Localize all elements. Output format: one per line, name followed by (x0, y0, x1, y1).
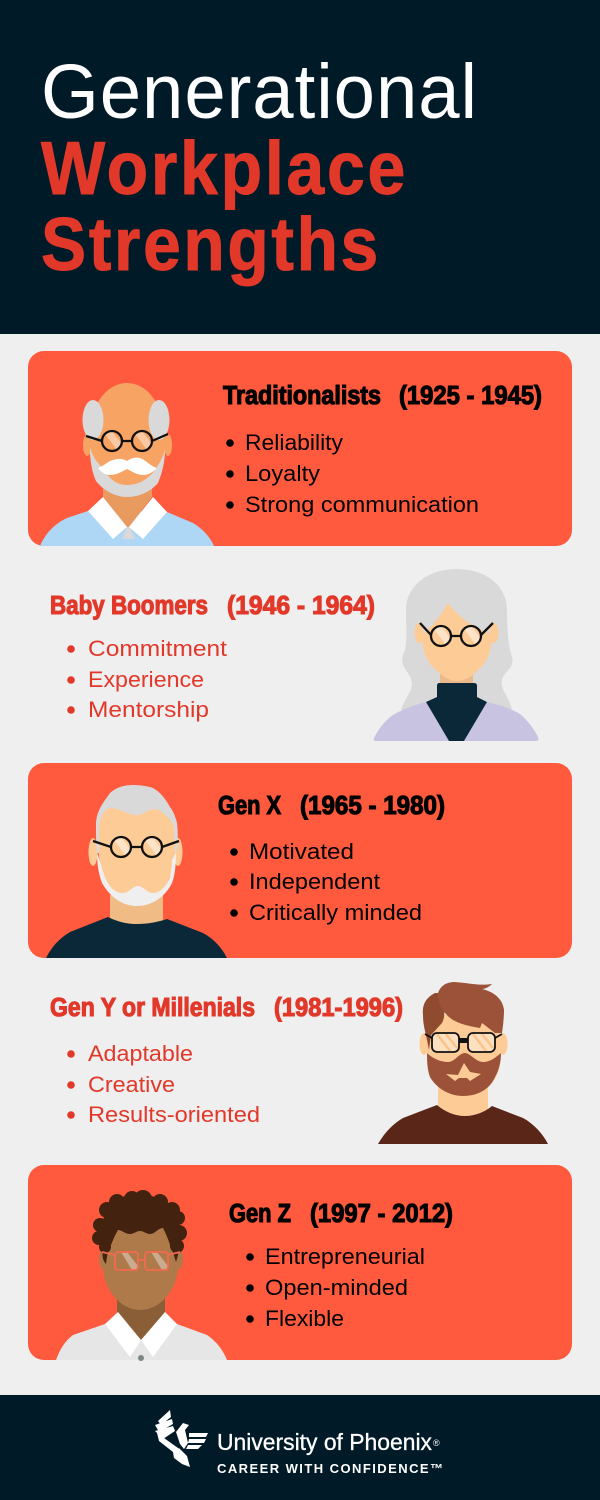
heading: Gen Z: Gen Z (229, 1200, 291, 1228)
list: Traditionalists strengths (226, 430, 479, 517)
list: Gen Z strengths: Entrepreneurial (265, 1244, 425, 1269)
list: Gen X strengths: Critically minded (249, 900, 422, 925)
list: Traditionalists strengths: Loyalty (245, 461, 320, 486)
list: Traditionalists strengths: Strong communication (245, 492, 479, 517)
panel: Baby Boomers (50, 569, 538, 741)
heading: Baby Boomers: Baby Boomers (50, 592, 208, 620)
list: Gen X strengths (230, 839, 422, 925)
list: Gen Y strengths: Adaptable (88, 1041, 193, 1066)
list: Gen Z strengths: Open-minded (265, 1275, 408, 1300)
panel: Traditionalists (28, 351, 572, 546)
heading: Gen X: Gen X (218, 792, 281, 820)
list: Traditionalists strengths: Reliability (245, 430, 343, 455)
icon: man with curly hair (56, 1190, 227, 1361)
heading: Gen X: (1965 - 1980) (300, 792, 445, 820)
list: Gen Z strengths: Flexible (265, 1306, 344, 1331)
list: Baby Boomers strengths: Experience (88, 667, 204, 692)
title line: Strengths: Strengths (41, 202, 381, 286)
icon: man with brown hair and beard (378, 982, 548, 1144)
list: Gen Y strengths: Creative (88, 1072, 175, 1097)
heading: Gen Y or Millenials: Gen Y or Millenials (50, 994, 255, 1022)
logo wordmark: University of Phoenix (217, 1429, 432, 1455)
heading: Traditionalists (223, 382, 542, 410)
panel: Gen Y or Millenials (50, 982, 548, 1144)
title line: Generational: Generational (41, 49, 478, 135)
heading: Traditionalists: (1925 - 1945) (399, 382, 542, 410)
title line: Workplace: Workplace (41, 126, 408, 210)
logo tagline: CAREER WITH CONFIDENCE™ (217, 1461, 443, 1476)
icon: bald older man with white moustache (40, 383, 214, 546)
registered mark: ® (433, 1438, 440, 1448)
list: Gen Z strengths (246, 1244, 425, 1331)
heading: Gen Y or Millenials (50, 994, 403, 1022)
heading: Gen Z (229, 1200, 453, 1228)
list: Gen Y strengths (67, 1041, 260, 1127)
list: Gen X strengths: Motivated (249, 839, 354, 864)
list: Baby Boomers strengths: Mentorship (88, 697, 209, 722)
footer band with logo (0, 1395, 600, 1500)
heading: Baby Boomers: (1946 - 1964) (227, 592, 375, 620)
heading: Gen Z: (1997 - 2012) (310, 1200, 453, 1228)
header band with title (0, 0, 600, 334)
heading: Baby Boomers (50, 592, 375, 620)
icon: older woman with long grey hair (374, 569, 538, 741)
panel: Gen X (28, 763, 572, 958)
list: Baby Boomers strengths: Commitment (88, 636, 227, 661)
list: Baby Boomers strengths (67, 636, 227, 722)
heading: Traditionalists: Traditionalists (223, 382, 381, 410)
heading: Gen Y or Millenials: (1981-1996) (274, 994, 403, 1022)
list: Gen X strengths: Independent (249, 869, 380, 894)
icon: man with grey hair and white beard (46, 785, 227, 958)
icon: phoenix logo (155, 1410, 208, 1467)
list: Gen Y strengths: Results-oriented (88, 1102, 260, 1127)
heading: Gen X (218, 792, 445, 820)
panel: Gen Z (28, 1165, 572, 1361)
